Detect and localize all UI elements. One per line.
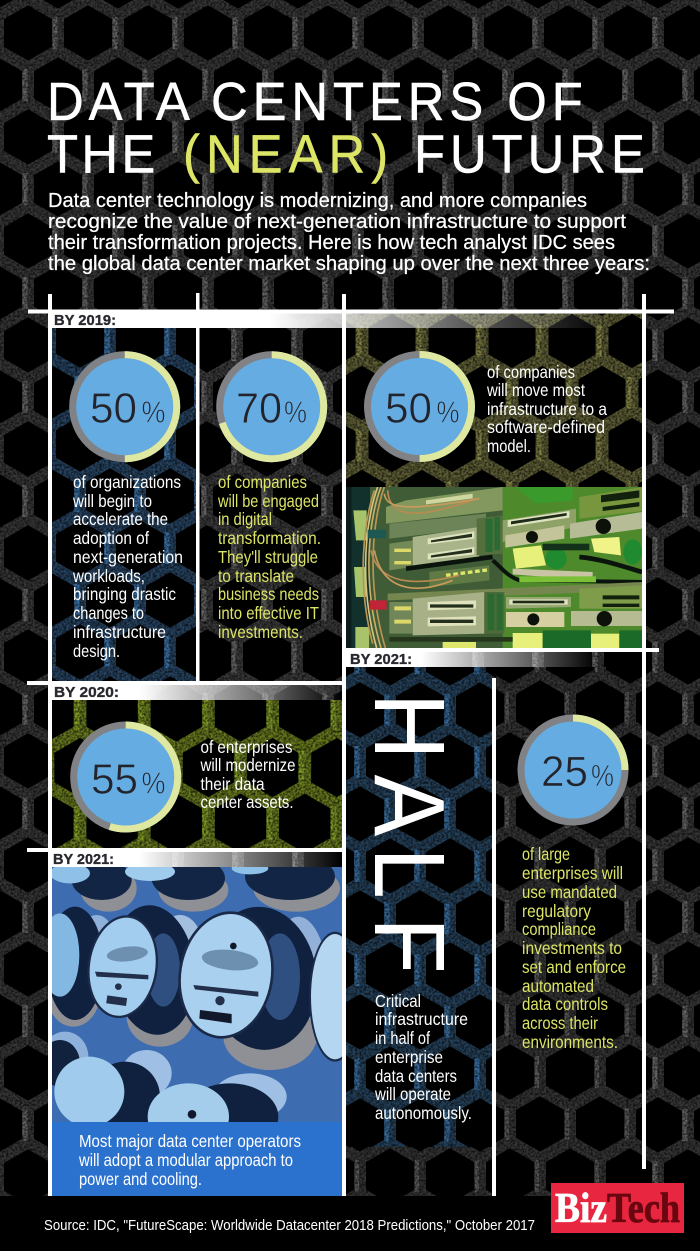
label bar: by 2019 [52, 312, 610, 329]
donut: 70% [220, 355, 324, 459]
photo: server rack [346, 487, 642, 648]
text: of large enterprises: compliance [522, 919, 596, 939]
donut: 70%: 70 [236, 386, 282, 432]
text: of organizations: changes to [73, 603, 144, 623]
text: critical infrastructure: enterprise [375, 1047, 443, 1067]
text: of organizations [72, 472, 183, 661]
text: of enterprises: center assets. [200, 792, 294, 812]
connector block [477, 515, 503, 555]
text: of organizations: adoption of [73, 528, 149, 548]
middle black cable [406, 557, 493, 569]
meter: right [309, 932, 342, 1062]
label bar: by 2020: BY 2020: [54, 684, 119, 701]
text: of companies: of companies [218, 472, 307, 492]
donut: 50%: % [142, 394, 166, 430]
text: of organizations: next-generation [73, 547, 183, 567]
text: of companies: infrastructure to a [487, 399, 607, 419]
text: of companies: will be engaged [217, 491, 319, 511]
text: of large enterprises: environments. [522, 1032, 618, 1052]
lower rail [388, 582, 642, 600]
upper right cards [503, 509, 576, 542]
text: of companies: business needs [218, 584, 319, 604]
meter: left [52, 906, 109, 1027]
footer band [0, 1196, 700, 1251]
donut: 50% [73, 355, 177, 459]
text: of companies: to translate [218, 566, 294, 586]
donut: 25% [521, 718, 625, 822]
logo: BizTech: Tech [607, 1186, 680, 1232]
text: of enterprises: of enterprises [200, 737, 293, 757]
cables [363, 487, 479, 648]
intro text: the global data center market shaping up over the next three years: [48, 253, 650, 275]
logo: BizTech [551, 1183, 684, 1233]
text: of large enterprises: use mandated [522, 882, 617, 902]
text: of enterprises: will modernize [200, 755, 296, 775]
label bar: by 2021 right [346, 651, 596, 668]
text: of enterprises [200, 737, 296, 812]
top row meters [52, 867, 340, 912]
callout: modular approach: will adopt a modular approach to [78, 1150, 293, 1170]
donut: 55%: % [142, 766, 166, 800]
callout: modular approach: Most major data center operators [79, 1131, 301, 1151]
text: of companies: software-defined [487, 417, 605, 437]
donut: 25%: % [591, 758, 614, 793]
text: of companies: will move most [486, 380, 585, 400]
donut: 25%: 25 [541, 749, 588, 796]
text: critical infrastructure: infrastructure [375, 1009, 468, 1029]
panel: 55% of enterprises [52, 700, 342, 848]
text: critical infrastructure [374, 991, 472, 1123]
text: of large enterprises: across their [522, 1013, 598, 1033]
text: of companies: investments. [218, 622, 303, 642]
photo: electric meters [52, 867, 342, 1122]
text: of companies [217, 472, 321, 642]
panel: 70% of companies [199, 328, 342, 681]
white grid lines [27, 293, 674, 1196]
text: critical infrastructure: in half of [375, 1028, 430, 1048]
text: of companies: of companies [487, 362, 575, 382]
panel: 50% of organizations [52, 328, 196, 681]
donut: 50%: 50 [90, 386, 137, 432]
text: of large enterprises: automated [522, 976, 594, 996]
cable ties [368, 530, 386, 538]
text: critical infrastructure: autonomously. [375, 1103, 472, 1123]
text: critical infrastructure: data centers [375, 1066, 457, 1086]
text: of large enterprises: set and enforce [522, 957, 626, 977]
text: of companies: transformation. [218, 528, 321, 548]
text: of organizations: workloads, [72, 566, 145, 586]
text: of companies [486, 362, 607, 456]
lower riser card [413, 592, 484, 635]
label bar: by 2021 left: BY 2021: [53, 851, 114, 868]
text: of organizations: bringing drastic [73, 584, 176, 604]
intro text: Data center technology is modernizing, and more companies [48, 190, 587, 212]
text: of large enterprises: data controls [522, 994, 608, 1014]
text: of organizations: infrastructure [73, 622, 166, 642]
text: of organizations: accelerate the [73, 509, 168, 529]
lower right cards [506, 597, 571, 609]
text: of companies: in digital [218, 509, 272, 529]
title: (NEAR) [183, 125, 388, 185]
top board [386, 487, 503, 524]
panel: 25% of large enterprises [496, 667, 642, 1196]
source line: Source: IDC, "FutureScape: Worldwide Datacenter 2018 Predictions," October 2017 [44, 1218, 535, 1234]
text: of enterprises: their data [200, 774, 265, 794]
text: of organizations: design. [73, 641, 120, 661]
text: of large enterprises [522, 844, 626, 1052]
text: of large enterprises: enterprises will [522, 863, 623, 883]
title: THE [47, 125, 155, 185]
text: of organizations: will begin to [72, 491, 152, 511]
left dark strip [351, 487, 370, 648]
label bar: by 2021 right: BY 2021: [350, 651, 412, 668]
text: of large enterprises: investments to [522, 938, 622, 958]
intro text [48, 190, 650, 275]
text: critical infrastructure: Critical [375, 991, 421, 1011]
panel: 50% software-defined [346, 313, 642, 487]
intro text: recognize the value of next-generation infrastructure to support [48, 211, 626, 233]
panel: HALF [346, 667, 492, 1196]
callout: modular approach [52, 1122, 342, 1196]
label bar: by 2019: BY 2019: [54, 312, 116, 329]
donut: 50%: 50 [385, 386, 432, 432]
text: critical infrastructure: will operate [374, 1084, 451, 1104]
donut: 55%: 55 [91, 756, 138, 804]
meter: main [178, 906, 322, 1070]
upper riser card [413, 527, 479, 567]
donut: 70%: % [284, 394, 307, 430]
text: of organizations: of organizations [73, 472, 181, 492]
intro text: their transformation projects. Here is how tech analyst IDC sees [48, 232, 615, 254]
bright components [513, 545, 546, 569]
lower connector block [484, 592, 504, 634]
title [47, 73, 645, 185]
label bar: by 2021 left [52, 851, 342, 868]
donut: 50%: % [436, 394, 460, 430]
donut: 55% [74, 725, 178, 829]
text: of large enterprises: of large [522, 844, 570, 864]
label bar: by 2020 [52, 684, 342, 701]
logo: BizTech: Biz [555, 1186, 607, 1232]
donut: 50% [368, 354, 472, 458]
title: FUTURE [414, 125, 645, 185]
title: DATA CENTERS OF [47, 73, 583, 132]
bottom meters [52, 1032, 287, 1122]
text: of companies: into effective IT [218, 603, 319, 623]
text: of companies: model. [487, 436, 531, 456]
text: of companies: They'll struggle [218, 547, 318, 567]
big word: HALF: HALF [353, 693, 465, 974]
text: of large enterprises: regulatory [522, 901, 591, 921]
callout: modular approach: power and cooling. [79, 1169, 202, 1189]
meter: second [88, 905, 198, 1047]
